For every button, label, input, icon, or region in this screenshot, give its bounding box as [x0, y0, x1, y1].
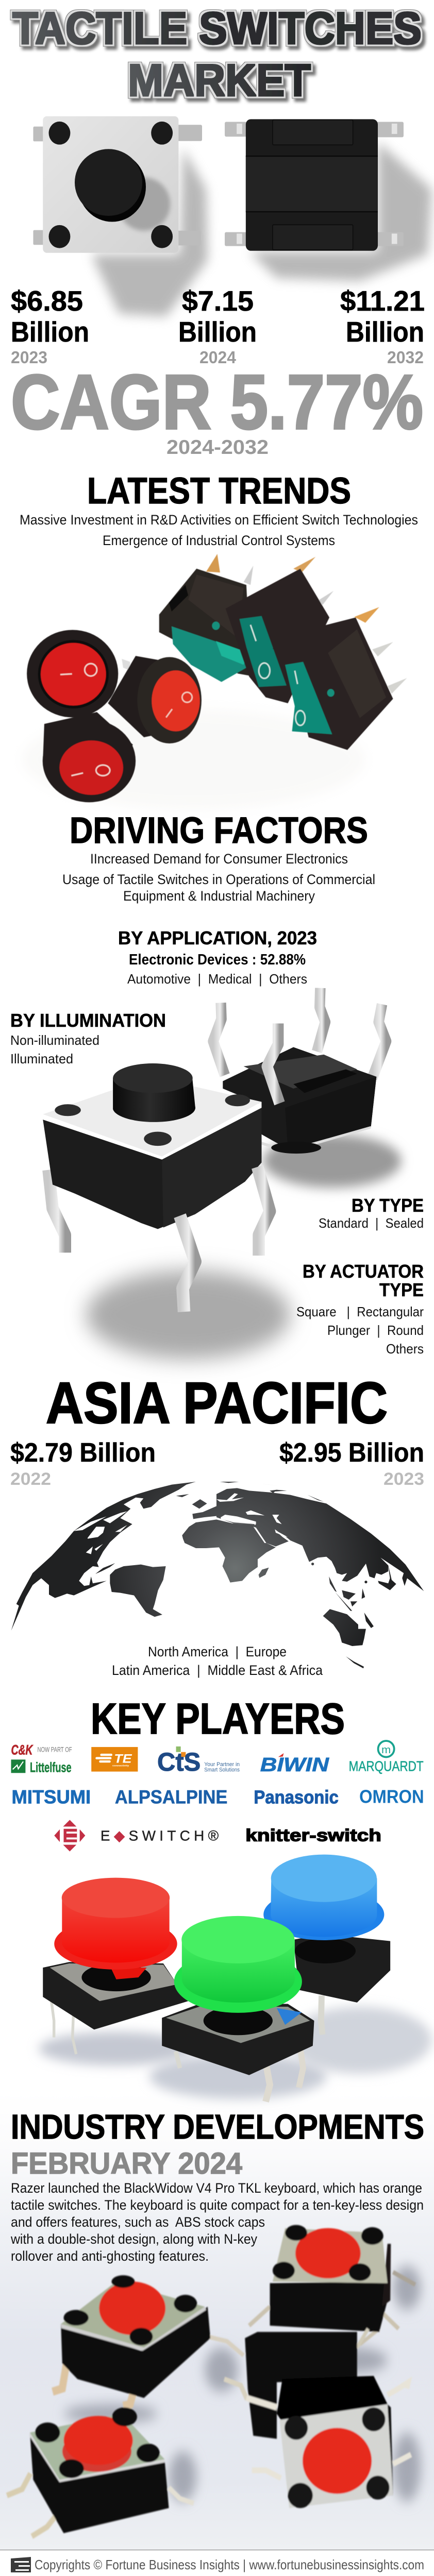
- switch: bottom right: [246, 2376, 411, 2508]
- company logos: [11, 1741, 424, 1852]
- segment: by actuator type: BY ACTUATOR: [303, 1261, 424, 1282]
- logo: Alps Alpine: ALPSALPINE: [115, 1786, 227, 1807]
- logo: TE Connectivity: connectivity: [112, 1764, 129, 1767]
- heading: latest trends: LATEST TRENDS: [87, 471, 351, 512]
- segment: by actuator type: Square | Rectangular: [296, 1304, 424, 1319]
- segment: by illumination: Illuminated: [10, 1051, 73, 1066]
- logo: Omron: OMRON: [359, 1786, 424, 1807]
- logo: Marquardt: [349, 1741, 424, 1774]
- segment: by type: [319, 1195, 424, 1231]
- logo: CTS: CtS: [157, 1748, 201, 1776]
- logo: E-Switch: [54, 1820, 219, 1852]
- stat: 2032 market size: $11.21: [340, 285, 425, 317]
- logo: TE Connectivity: [91, 1747, 138, 1772]
- green switch: [162, 1916, 314, 2102]
- image: top view tactile switches: [33, 116, 432, 316]
- logo: C&K Littelfuse: C&K: [11, 1742, 34, 1758]
- logo: C&K Littelfuse: Littelfuse: [30, 1760, 72, 1775]
- title: [12, 3, 422, 106]
- subheading: date: FEBRUARY 2024: [11, 2147, 242, 2180]
- heading: driving factors: DRIVING FACTORS: [70, 810, 368, 851]
- stat: 2032 market size: Billion: [346, 316, 424, 348]
- stat: asia pacific 2022: [10, 1438, 156, 1489]
- stat: 2024 market size: $7.15: [182, 285, 254, 317]
- segment: by illumination: [10, 1010, 166, 1066]
- panel background: industry developments photo: [0, 2092, 434, 2550]
- logo: CTS: Smart Solutions: [204, 1767, 240, 1773]
- stat: 2024 market size: Billion: [178, 316, 257, 348]
- segment: by illumination: BY ILLUMINATION: [10, 1010, 166, 1031]
- logo: Knitter-switch: knitter-switch: [245, 1826, 381, 1845]
- stat: 2023 market size: 2023: [11, 348, 47, 367]
- text: driving factors list: Equipment & Industrial Machinery: [123, 888, 315, 904]
- image: rocker switches: [22, 554, 407, 810]
- text: development description: with a double-shot design, along with N-key: [10, 2231, 257, 2247]
- stat: asia pacific 2023: 2023: [383, 1469, 424, 1489]
- heading: key players: KEY PLAYERS: [91, 1694, 345, 1743]
- heading: asia pacific: ASIA PACIFIC: [46, 1370, 388, 1435]
- stat: 2032 market size: 2032: [387, 348, 424, 367]
- red switch: [43, 1878, 188, 2054]
- stat: 2024 market size: 2024: [199, 348, 237, 367]
- image: red button SMD switches: [7, 2225, 421, 2536]
- stat: asia pacific 2023: [279, 1438, 424, 1489]
- text: development description: and offers features, such as ABS stock caps: [11, 2214, 265, 2230]
- segment: by actuator type: TYPE: [379, 1279, 424, 1300]
- logo: C&K Littelfuse: [11, 1742, 72, 1775]
- switch: bottom left: [7, 2408, 194, 2536]
- logo: CTS: Your Partner in: [204, 1761, 240, 1768]
- logo: CTS: [157, 1747, 240, 1776]
- logo: Mitsumi: MITSUMI: [12, 1786, 91, 1807]
- blue switch: [263, 1855, 390, 2035]
- stat: 2032 market size: [340, 285, 425, 367]
- logo: Biwin: BIWIN: [260, 1754, 329, 1776]
- text: trends list: Emergence of Industrial Control Systems: [103, 533, 335, 548]
- switch: top right: [249, 2225, 415, 2345]
- text: other regions: North America | Europe: [148, 1644, 287, 1659]
- stat: asia pacific 2022: 2022: [10, 1469, 51, 1489]
- segment: by application: BY APPLICATION, 2023: [118, 927, 317, 948]
- logo: C&K Littelfuse: NOW PART OF: [37, 1745, 72, 1754]
- logo: E-Switch: E◆SWITCH®: [101, 1827, 219, 1844]
- stat: CAGR: 2024-2032: [166, 436, 269, 459]
- stat: 2023 market size: Billion: [11, 316, 89, 348]
- switch: middle right back: [224, 2329, 368, 2439]
- segment: by illumination: Non-illuminated: [10, 1032, 99, 1048]
- stat: asia pacific 2023: $2.95 Billion: [279, 1438, 424, 1468]
- stat: 2023 market size: $6.85: [11, 285, 83, 317]
- segment: by actuator type: Others: [386, 1341, 424, 1357]
- stat: 2023 market size: [11, 285, 89, 367]
- stat: asia pacific 2022: $2.79 Billion: [10, 1438, 156, 1468]
- text: other regions: Latin America | Middle East & Africa: [112, 1663, 323, 1678]
- segment: by type: BY TYPE: [352, 1195, 424, 1216]
- text: development description: [10, 2180, 424, 2264]
- world map globe: [11, 1482, 424, 1668]
- soft shadows on the table: [64, 2266, 421, 2502]
- switch: middle left: [53, 2275, 244, 2406]
- text: driving factors list: Usage of Tactile Switches in Operations of Commercial: [62, 872, 375, 887]
- text: driving factors list: IIncreased Demand for Consumer Electronics: [90, 851, 348, 867]
- footer: [0, 2550, 434, 2572]
- image: coloured keycap switches: [39, 1855, 432, 2102]
- image: 3D tactile switches: [43, 988, 402, 1359]
- segment: by actuator type: Plunger | Round: [327, 1323, 424, 1338]
- icon: Fortune Business Insights logo: [11, 2557, 31, 2572]
- text: other regions: [112, 1644, 323, 1678]
- text: trends list: [20, 512, 418, 548]
- segment: by application: [118, 927, 317, 987]
- segment: by application: Electronic Devices : 52.88%: [129, 952, 306, 968]
- text: driving factors list: [62, 851, 375, 904]
- logo: TE Connectivity: TE: [114, 1752, 132, 1766]
- segment: by actuator type: [296, 1261, 424, 1357]
- title: MARKET: [128, 55, 311, 106]
- text: development description: rollover and anti-ghosting features.: [11, 2248, 209, 2264]
- logo: Marquardt: m: [381, 1744, 391, 1756]
- segment: by type: Standard | Sealed: [319, 1215, 424, 1231]
- segment: by application: Automotive | Medical | Others: [127, 971, 307, 987]
- logo: Panasonic: Panasonic: [254, 1787, 339, 1807]
- stat: 2024 market size: [178, 285, 257, 367]
